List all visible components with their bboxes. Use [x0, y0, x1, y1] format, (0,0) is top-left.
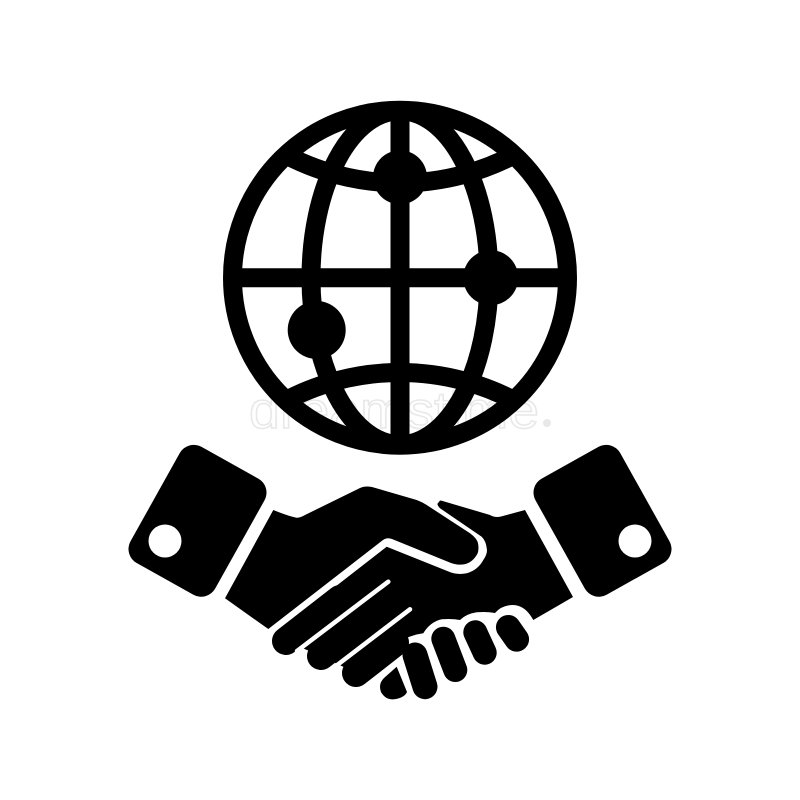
right cuff [528, 439, 677, 603]
right hand and palm [277, 501, 573, 673]
finger gaps [297, 582, 410, 669]
illustration: globe over handshake [128, 100, 672, 700]
icon: handshake [123, 439, 677, 699]
left hand upper [225, 486, 478, 629]
left hand fingers [286, 599, 395, 673]
globe grid lines [242, 120, 558, 436]
icon: globe [232, 110, 568, 445]
left cuff [123, 439, 272, 603]
watermark: dreamstime [249, 382, 539, 440]
globe nodes [288, 150, 518, 359]
left hand last finger [380, 667, 407, 699]
right hand fingers [415, 627, 517, 687]
globe outline [232, 110, 568, 445]
